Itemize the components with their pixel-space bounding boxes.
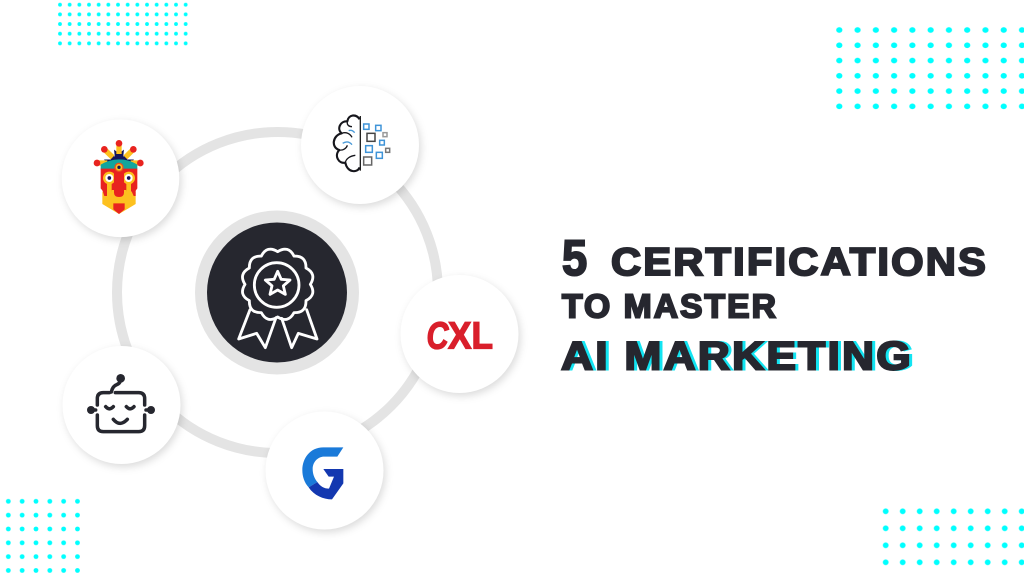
icon: half brain with pixels xyxy=(334,116,390,171)
icon: colourful mask xyxy=(94,140,144,214)
node: G logo xyxy=(266,412,384,530)
node: CXL logo xyxy=(400,275,518,393)
title line: 5 certifications: CERTIFICATIONS xyxy=(611,241,988,284)
node: mask logo xyxy=(62,120,179,237)
dot pattern: top right xyxy=(830,22,1024,114)
icon: blue G xyxy=(302,447,343,499)
title line: 5 certifications xyxy=(562,230,988,286)
node: brain logo xyxy=(301,86,419,204)
dot pattern: bottom left xyxy=(1,494,84,577)
icon: award rosette with star xyxy=(239,249,317,348)
icon: smiling robot xyxy=(87,374,155,432)
title line: 5 certifications: 5 xyxy=(562,230,589,286)
title xyxy=(561,230,988,378)
connecting ring xyxy=(117,132,438,453)
title line: AI marketing: AI MARKETING xyxy=(561,334,913,378)
dot pattern: top left xyxy=(55,0,190,48)
logo text: CXL: C xyxy=(426,315,449,357)
dot pattern: bottom right xyxy=(877,503,1024,571)
title line: to master: TO MASTER xyxy=(562,288,778,324)
logo text: CXL xyxy=(426,315,493,357)
central badge xyxy=(195,210,359,374)
logo text: CXL: XL xyxy=(448,315,493,357)
title line: AI marketing: AI MARKETING xyxy=(564,334,916,378)
node: robot icon xyxy=(62,346,180,464)
